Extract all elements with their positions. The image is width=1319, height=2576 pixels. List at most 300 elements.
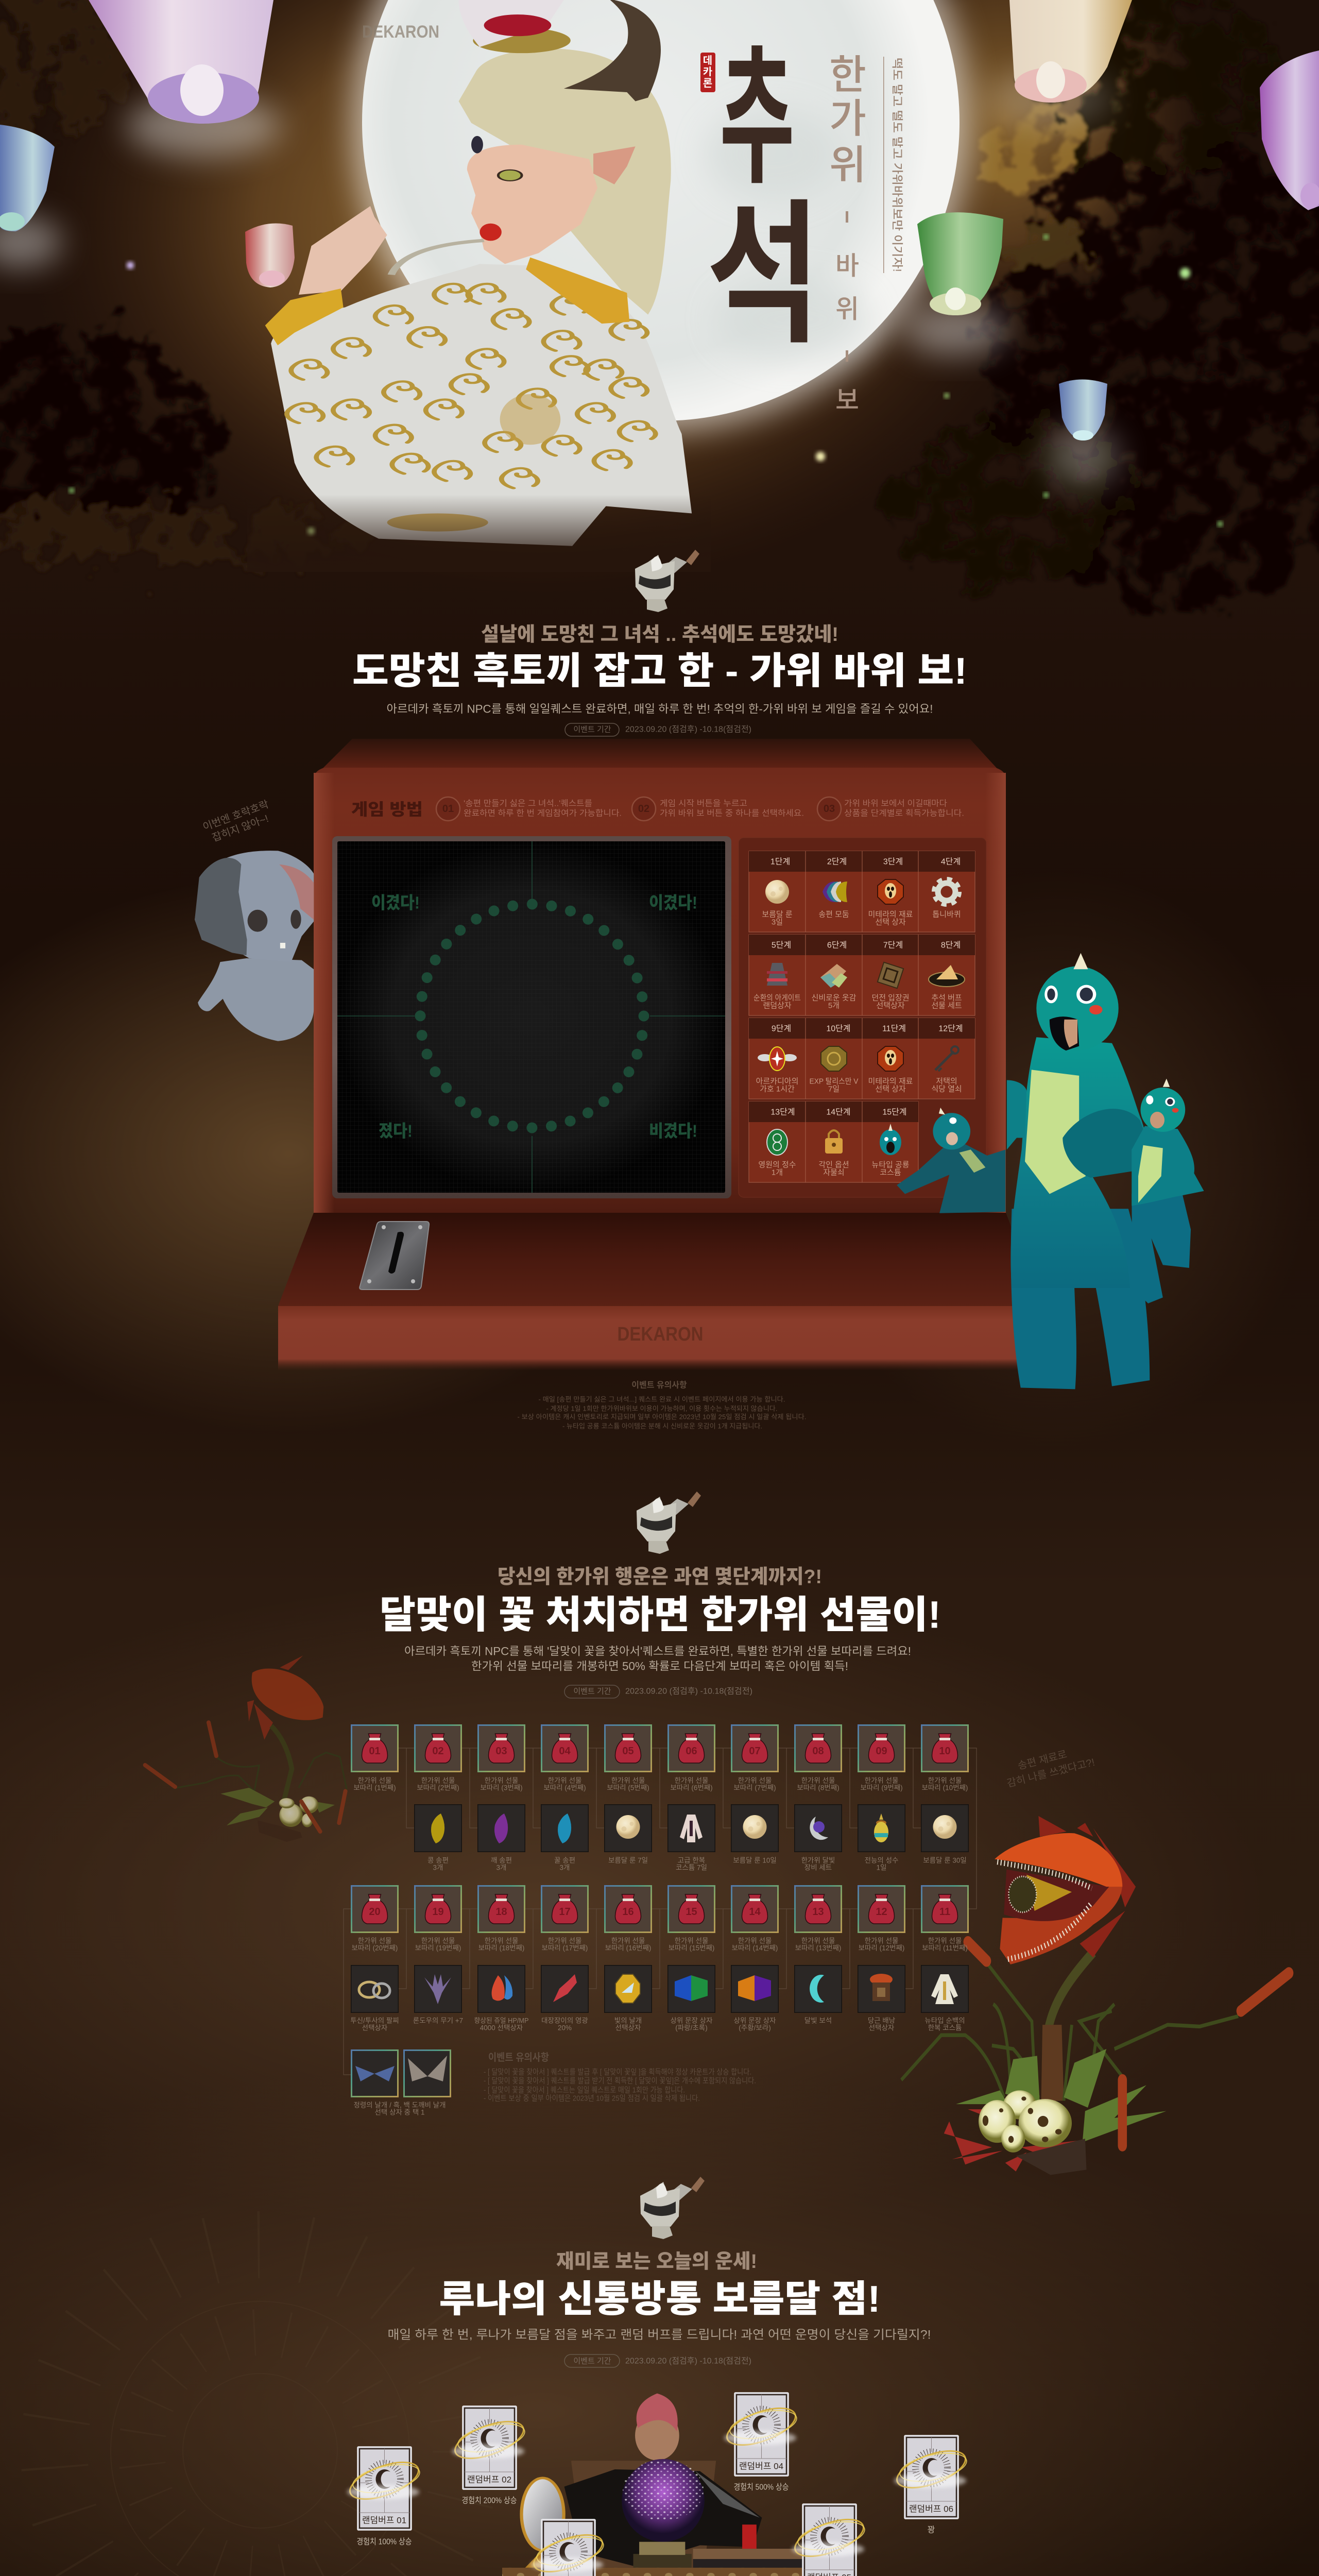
result labels: 이겼다!	[371, 893, 420, 912]
prize table row 4: 1개	[772, 1168, 783, 1177]
dress	[564, 2469, 762, 2566]
prize table row 2: 선택상자	[876, 1002, 905, 1010]
rabbit head	[195, 851, 314, 962]
card: buff 01	[346, 2447, 423, 2546]
plant: left flower	[145, 1655, 347, 1842]
card: bag 12	[858, 1886, 904, 1952]
reward: goblin wing	[404, 2050, 450, 2097]
character: mini dinosaur on cabinet	[897, 1108, 1005, 1213]
game screen	[332, 836, 731, 1198]
table lace	[502, 2568, 803, 2576]
dino horn	[1073, 953, 1088, 969]
reward: moon rune 10 days	[731, 1805, 778, 1864]
title: 추석: 석	[707, 189, 820, 362]
rabbit ear	[195, 858, 247, 955]
robe gold embroidery	[287, 284, 656, 532]
small dino head	[1140, 1088, 1185, 1132]
reward: moon rune 7 days: 보름달 룬 7일	[608, 1857, 648, 1864]
hair	[459, 48, 671, 315]
lantern: blue small	[1047, 379, 1119, 487]
fade below figure	[247, 495, 711, 572]
icon: mortar	[637, 1492, 701, 1554]
lips	[479, 224, 502, 241]
wings label: 선택 상자 중 택 1	[374, 2108, 425, 2116]
reward: sesame songpyeon: 깨 송편	[491, 1857, 512, 1864]
wings label	[353, 2101, 446, 2116]
reward: honey songpyeon: 꿀 송편	[554, 1857, 575, 1864]
reward: rondo weapon: 론도우의 무기 +7	[413, 2016, 463, 2025]
prize table row 1: 선택 상자	[875, 918, 906, 926]
flower upper jaw	[995, 1833, 1122, 1887]
event period: 2023.09.20 (점검후) -10.18(점검전)	[625, 1687, 752, 1696]
prize table row 2: 7단계	[883, 941, 903, 950]
reward: crest box blue green: (파랑/초록)	[675, 2024, 708, 2032]
description: 한가위 선물 보따리를 개봉하면 50% 확률로 다음단계 보따리 혹은 아이템 획득!	[471, 1660, 848, 1672]
card: buff 02: 경험치 200% 상승	[461, 2496, 517, 2505]
prize table row 1: 3단계	[883, 857, 903, 867]
rabbit body	[198, 958, 314, 1041]
hair bun	[473, 28, 571, 53]
lantern: small red	[245, 224, 295, 287]
prize table row 4: 14단계	[826, 1108, 851, 1117]
character: luna with crystal ball	[502, 2394, 803, 2576]
reward: rondo weapon	[413, 1965, 463, 2025]
dino left arm	[1007, 1080, 1026, 1149]
heading: 도망친 흑토끼 잡고 한 - 가위 바위 보!	[352, 651, 967, 692]
dino mouth	[1050, 1016, 1079, 1050]
card: bag 19: 보따리 (19번째)	[415, 1944, 461, 1952]
card: bag 13: 보따리 (13번째)	[795, 1944, 841, 1952]
card: bag 15: 15	[686, 1906, 697, 1918]
prize table row 2: 신비로운 옷감	[812, 993, 857, 1003]
tongue	[1026, 1875, 1072, 1911]
eye	[498, 170, 522, 181]
coin slot plate	[359, 1222, 429, 1290]
card: bag 18	[478, 1886, 524, 1952]
step 01: '송편 만들기 싫은 그 녀석..'퀘스트를	[464, 799, 592, 808]
card: bag 07: 07	[749, 1745, 761, 1757]
reward: white hanbok	[921, 1965, 968, 2032]
step 03: 03	[824, 803, 835, 815]
card: bag 05: 05	[622, 1745, 634, 1757]
card: bag 11: 11	[939, 1906, 950, 1918]
dino eyes	[1044, 986, 1058, 1003]
prize table row 2: 6단계	[827, 941, 847, 950]
card: bag 02: 02	[432, 1745, 444, 1757]
flower lower jaw	[1000, 1883, 1122, 1964]
prize table row 2: 8단계	[941, 941, 961, 950]
event notes 1: - 보상 아이템은 캐시 인벤토리로 지급되며 일부 아이템은 2023년 10월 25일 점검 시 일괄 삭제 됩니다.	[517, 1413, 807, 1421]
prize table row 2: 던전 입장권	[871, 993, 910, 1003]
hand	[299, 206, 387, 295]
left plant eggs	[279, 1804, 303, 1827]
card: buff 04: 경험치 500% 상승	[733, 2482, 789, 2492]
card: bag 18: 18	[495, 1906, 507, 1918]
hero section	[0, 0, 1319, 613]
left plant buds	[145, 1722, 346, 1832]
prize table row 1: 미테라의 재료	[868, 910, 913, 919]
card: bag 16	[605, 1886, 651, 1952]
heading: 루나의 신통방통 보름달 점!	[439, 2279, 881, 2320]
left plant rock	[258, 1820, 302, 1842]
red petals	[944, 2109, 1080, 2172]
mini eye	[949, 1117, 956, 1124]
rabbit teeth	[280, 943, 285, 948]
description: 아르데카 흑토끼 NPC를 통해 일일퀘스트 완료하면, 매일 하루 한 번! 추억의 한-가위 바위 보 게임을 즐길 수 있어요!	[386, 703, 933, 715]
card: bag 20: 한가위 선물	[358, 1937, 391, 1944]
card: bag 01: 보따리 (1번째)	[353, 1784, 396, 1792]
cabinet base front	[278, 1306, 1041, 1370]
reward: honey songpyeon	[541, 1805, 588, 1871]
card: bag 13: 13	[812, 1906, 824, 1918]
prize table row 4	[749, 1101, 918, 1182]
card: bag 14: 한가위 선물	[738, 1937, 772, 1944]
card: bag 04	[542, 1725, 588, 1792]
result labels: 이겼다!	[649, 893, 697, 912]
cabinet logo: DEKARON	[617, 1324, 704, 1345]
card: bag 12: 보따리 (12번째)	[859, 1944, 904, 1952]
handwritten note: rabbit	[201, 798, 275, 845]
eggs	[979, 2090, 1072, 2153]
mini head	[933, 1113, 970, 1149]
event notes 2: - [ 달맞이 꽃을 찾아서 ] 퀘스트를 발급 후 [ 달맞이 꽃잎 ]을 획득해야 정상 카운트가 상승 합니다.	[484, 2068, 751, 2076]
small dino face	[1150, 1112, 1164, 1128]
prize table row 3: 9단계	[772, 1024, 791, 1033]
title: 추석: 추	[720, 36, 795, 201]
prize table row 4: 코스튬	[880, 1168, 901, 1177]
card: bag 15: 보따리 (15번째)	[669, 1944, 714, 1952]
icon: mortar	[635, 550, 699, 612]
reward: white hanbok: 뉴타입 순백의	[924, 2016, 965, 2025]
card: bag 10: 보따리 (10번째)	[922, 1784, 968, 1792]
reward: holy water: 전능의 성수	[865, 1857, 898, 1864]
reward: bracelet box: 선택상자	[362, 2024, 388, 2032]
card: bag 01: 01	[369, 1745, 381, 1757]
moon	[352, 0, 970, 431]
reward: moon rune 7 days	[605, 1805, 652, 1864]
reward: crest box blue green	[668, 1965, 715, 2032]
reward: moonlight gear set: 장비 세트	[804, 1864, 832, 1871]
plant: right flower	[901, 1816, 1289, 2175]
face	[1064, 1020, 1077, 1047]
card: buff 01: 랜덤버프 01	[362, 2515, 406, 2526]
row 4: rewards	[350, 1965, 968, 2032]
card: bag 03: 03	[495, 1745, 507, 1757]
subheading: 당신의 한가위 행운은 과연 몇단계까지?!	[498, 1566, 822, 1588]
card: bag 16: 보따리 (16번째)	[605, 1944, 651, 1952]
event period	[564, 2354, 751, 2367]
logo: DEKARON: DEKARON	[362, 22, 439, 42]
card: bag 05: 한가위 선물	[611, 1776, 645, 1785]
mirror	[522, 2478, 564, 2568]
step 02	[632, 797, 804, 821]
card: buff 04: 랜덤버프 04	[739, 2462, 783, 2471]
reward: carrot backpack: 당근 배낭	[868, 2016, 895, 2025]
how to play: 게임 방법	[351, 800, 423, 819]
left plant head	[252, 1669, 323, 1720]
card: bag 19	[415, 1886, 461, 1952]
prize table row 4: 자물쇠	[823, 1168, 845, 1177]
event notes 1: - 매일 [송편 만들기 싫은 그 녀석...] 퀘스트 완료 시 이벤트 페이지에서 이용 가능 합니다.	[539, 1395, 785, 1403]
event notes 2: - 이벤트 보상 중 일부 아이템은 2023년 10월 25일 점검 시 일괄 삭제 됩니다.	[484, 2094, 700, 2103]
title: 추석	[707, 36, 820, 362]
leaves	[956, 2049, 1167, 2142]
dino legs	[1011, 1209, 1150, 1389]
heading: 달맞이 꽃 처치하면 한가위 선물이!	[380, 1593, 941, 1636]
reward: moonlight jewel	[795, 1965, 842, 2025]
dino body	[1010, 1037, 1156, 1288]
prize table row 3: 미테라의 재료	[868, 1077, 913, 1086]
seal: 카	[703, 66, 712, 78]
card: bag 07: 한가위 선물	[738, 1776, 772, 1785]
card: bag 14	[731, 1886, 778, 1952]
event notes 2: 이벤트 유의사항	[488, 2052, 549, 2063]
card: bag 04: 04	[559, 1745, 571, 1757]
prize table row 4: 영원의 정수	[758, 1160, 796, 1170]
card: bag 17: 보따리 (17번째)	[542, 1944, 588, 1952]
prize table row 3: 아르카디아의	[756, 1077, 798, 1086]
prize table row 1: 2단계	[827, 857, 847, 867]
cabinet	[278, 739, 1041, 1370]
prize table row 4: 15단계	[882, 1108, 907, 1117]
card: bag 09: 보따리 (9번째)	[860, 1784, 903, 1792]
reward: wing of light: 빛의 날개	[614, 2016, 642, 2025]
handwritten note: plant	[1002, 1742, 1096, 1789]
reward: blacksmith glory: 대장장이의 영광	[541, 2016, 588, 2025]
decoration: faint moon emblem	[54, 2245, 466, 2576]
how to play	[351, 797, 964, 821]
character: big dinosaur	[1007, 953, 1157, 1389]
row 2: rewards	[415, 1805, 968, 1871]
character: woman in white hanbok	[265, 0, 692, 546]
chair	[571, 2461, 716, 2568]
mini horn	[939, 1108, 945, 1115]
reward: blacksmith glory: 20%	[558, 2024, 572, 2032]
card: bag 03: 한가위 선물	[485, 1776, 518, 1785]
card: bag 13	[795, 1886, 842, 1952]
small dino body	[1132, 1126, 1204, 1206]
wings label: 정령의 날개 / 흑, 백 도깨비 날개	[353, 2101, 446, 2109]
seal: 론	[703, 77, 712, 89]
lantern: green	[904, 212, 1007, 355]
prize table row 3: 7일	[828, 1085, 840, 1093]
prize table row 1: 보름달 룬	[762, 910, 793, 919]
handwritten note: rabbit: 이번엔 호락호락	[201, 798, 270, 833]
reward: white hanbok: 한복 코스튬	[928, 2024, 962, 2032]
handwritten note: plant: 송편 재료로	[1017, 1748, 1068, 1772]
event notes 2	[484, 2052, 756, 2103]
card: bag 15	[669, 1886, 715, 1952]
reward: jewel	[474, 1965, 528, 2032]
event period	[564, 1685, 752, 1698]
card: bag 17	[542, 1886, 588, 1952]
subtitle vertical: 한가위 바위 보: 바	[835, 251, 859, 280]
reward: bracelet box	[350, 1965, 399, 2032]
prize table row 3: 10단계	[826, 1024, 851, 1033]
forehead mark	[471, 136, 483, 154]
prize table row 2	[749, 935, 975, 1015]
event period: 이벤트 기간	[573, 725, 611, 734]
event period	[565, 723, 751, 736]
row 1: gift bags 01-10	[351, 1725, 968, 1792]
card: bag 20: 20	[369, 1906, 381, 1918]
reward: crest box orange purple: (주황/보라)	[739, 2024, 771, 2032]
left plant stem	[271, 1726, 292, 1803]
card: bag 17: 17	[559, 1906, 571, 1918]
prize table row 1	[749, 851, 975, 932]
stem	[1048, 1952, 1093, 2031]
mini face	[946, 1132, 958, 1145]
reward: honey songpyeon: 3개	[560, 1864, 570, 1871]
reward: bean songpyeon	[415, 1805, 461, 1871]
handwritten note: plant: 감히 나를 쓰겠다고?!	[1006, 1756, 1096, 1789]
result labels: 졌다!	[379, 1121, 413, 1141]
cabinet shelf	[278, 1213, 1041, 1306]
book stack	[693, 2549, 803, 2568]
event notes 1: - 뉴타입 공룡 코스튬 아이템은 분해 시 신비로운 옷감이 1개 지급됩니다.	[562, 1422, 762, 1430]
step 02: 게임 시작 버튼을 누르고	[660, 799, 747, 808]
card: bag 19: 한가위 선물	[421, 1937, 455, 1944]
reward: crest box orange purple: 상위 문장 상자	[733, 2016, 776, 2025]
buds	[968, 1942, 1289, 2146]
card: bag 20	[351, 1886, 398, 1952]
card: bag 08: 한가위 선물	[801, 1776, 835, 1785]
hair	[637, 2394, 678, 2431]
reward: carrot backpack	[858, 1965, 905, 2032]
reward: moon rune 10 days: 보름달 룬 10일	[733, 1857, 777, 1864]
event notes 1: - 계정당 1일 1회만 한가위바위보 이용이 가능하며, 이용 횟수는 누적되지 않습니다.	[546, 1404, 778, 1413]
card: bag 08: 보따리 (8번째)	[797, 1784, 840, 1792]
result labels	[371, 893, 697, 1141]
description: 아르데카 흑토끼 NPC를 통해 '달맞이 꽃을 찾아서'퀘스트를 완료하면, 특별한 한가위 선물 보따리를 드려요!	[404, 1645, 911, 1658]
reward: wing of light: 선택상자	[615, 2024, 641, 2032]
card: buff 06: 꽝	[928, 2526, 935, 2535]
cuff	[265, 289, 344, 345]
reward: crest box orange purple	[731, 1965, 778, 2032]
card: bag 12: 한가위 선물	[865, 1937, 898, 1944]
head	[635, 2411, 679, 2461]
subtitle vertical: 한가위 바위 보: 한	[829, 52, 866, 97]
card: bag 07: 보따리 (7번째)	[733, 1784, 776, 1792]
card: bag 11: 보따리 (11번째)	[922, 1944, 968, 1952]
ear	[593, 146, 636, 184]
dino right arm	[1063, 1109, 1157, 1178]
reward: moonlight gear set	[795, 1805, 842, 1871]
reward: holy water: 1일	[877, 1864, 886, 1871]
card: bag 16: 한가위 선물	[611, 1937, 645, 1944]
reward: spirit wing	[351, 2050, 398, 2097]
card: buff 03	[529, 2519, 607, 2576]
card: bag 14: 보따리 (14번째)	[732, 1944, 778, 1952]
card: bag 15: 한가위 선물	[675, 1937, 708, 1944]
card: bag 10	[922, 1725, 968, 1792]
prize table row 3: 선택 상자	[875, 1085, 906, 1093]
subtitle vertical: 한가위 바위 보: 보	[835, 386, 859, 415]
tree silhouettes	[0, 0, 1319, 613]
prize table row 3: 가호 1시간	[760, 1085, 795, 1093]
card: bag 09: 한가위 선물	[865, 1776, 898, 1785]
small dino legs	[1132, 1188, 1191, 1303]
reward: bean songpyeon: 콩 송편	[427, 1857, 449, 1864]
connector lines	[344, 1748, 977, 2075]
thin stems	[901, 1963, 1238, 2100]
reward: jewel: 향상된 쥬얼 HP/MP	[474, 2016, 528, 2025]
dino head	[1036, 967, 1119, 1050]
card: bag 16: 16	[622, 1906, 634, 1918]
vertical slogan: 떡도 말고 떨도 말고 가위바위보만 이기자!	[891, 58, 903, 272]
step 03: 가위 바위 보에서 이길때마다	[844, 799, 947, 808]
card: bag 18: 한가위 선물	[485, 1937, 518, 1944]
prize panel	[739, 838, 986, 1197]
card: bag 02: 한가위 선물	[421, 1776, 455, 1785]
card: buff 06	[893, 2435, 970, 2535]
card: bag 05: 보따리 (5번째)	[607, 1784, 649, 1792]
reward: wing of light	[605, 1965, 652, 2032]
prize table row 3: 식당 열쇠	[931, 1085, 962, 1093]
card: bag 12: 12	[876, 1906, 887, 1918]
small dino eyes	[1146, 1095, 1153, 1105]
subheading: 설날에 도망친 그 녀석 .. 추석에도 도망갔네!	[481, 624, 838, 646]
reward: sesame songpyeon: 3개	[496, 1864, 506, 1871]
step 03	[817, 797, 964, 821]
prize table row 3: 저택의	[936, 1077, 957, 1086]
reward: bracelet box: 투신/투사의 팔찌	[350, 2016, 399, 2025]
card: bag 02	[415, 1725, 461, 1792]
card: bag 08: 08	[812, 1745, 824, 1757]
event notes 1	[517, 1381, 807, 1430]
reward: moon rune 30 days: 보름달 룬 30일	[923, 1857, 967, 1864]
step 01: 완료하면 하루 한 번 게임참여가 가능합니다.	[464, 809, 622, 818]
reward: blacksmith glory	[541, 1965, 588, 2032]
card: bag 13: 한가위 선물	[801, 1937, 835, 1944]
step 01: 01	[442, 803, 454, 815]
card: bag 03	[478, 1725, 524, 1792]
card: buff 04	[723, 2393, 800, 2492]
small dino horn	[1163, 1079, 1170, 1087]
horn	[564, 0, 661, 101]
card: bag 04: 보따리 (4번째)	[543, 1784, 586, 1792]
prize table row 1: 송편 모둠	[818, 910, 849, 919]
hair strand	[391, 241, 484, 275]
card: bag 18: 보따리 (18번째)	[478, 1944, 524, 1952]
card: bag 10: 10	[939, 1745, 951, 1757]
description	[404, 1645, 911, 1672]
reward: hanbok costume: 고급 한복	[678, 1857, 705, 1864]
event period: 이벤트 기간	[573, 2357, 611, 2366]
card: bag 19: 19	[432, 1906, 444, 1918]
event period: 2023.09.20 (점검후) -10.18(점검전)	[625, 724, 751, 734]
card: bag 01: 한가위 선물	[358, 1776, 391, 1785]
event notes 2: - [ 달맞이 꽃을 찾아서 ] 퀘스트를 발급 받기 전 획득한 [ 달맞이 꽃잎]은 개수에 포함되지 않습니다.	[484, 2076, 756, 2086]
card: bag 01	[351, 1725, 398, 1792]
collar	[526, 258, 629, 324]
card: bag 04: 한가위 선물	[548, 1776, 581, 1785]
card: bag 06	[669, 1725, 715, 1792]
card: bag 05	[605, 1725, 651, 1792]
subtitle vertical: 한가위 바위 보	[829, 52, 866, 415]
card: bag 03: 보따리 (3번째)	[480, 1784, 523, 1792]
candle	[742, 2524, 757, 2549]
lantern: violet right	[1260, 50, 1319, 210]
result labels: 비겼다!	[649, 1121, 697, 1141]
event period: 2023.09.20 (점검후) -10.18(점검전)	[625, 2357, 751, 2366]
reward: carrot backpack: 선택상자	[869, 2024, 895, 2032]
feather	[459, 0, 564, 47]
crystal ball	[622, 2459, 705, 2542]
shoulder armor	[695, 2471, 760, 2518]
card: bag 17: 한가위 선물	[548, 1937, 581, 1944]
card: bag 11	[922, 1886, 968, 1952]
